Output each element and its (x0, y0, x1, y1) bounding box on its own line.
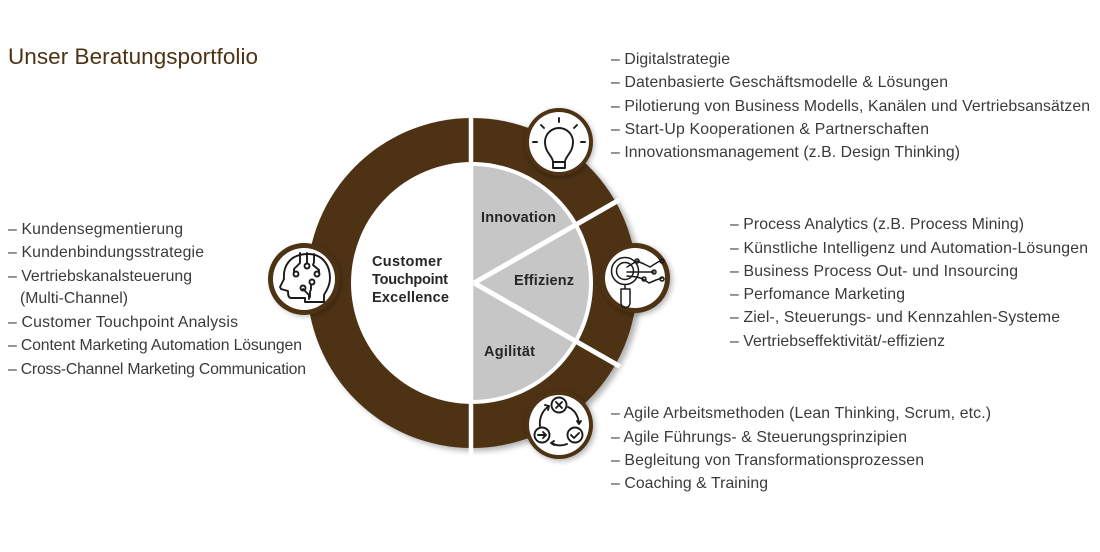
text block: Agilität services: – Coaching & Training (611, 475, 768, 492)
text block: Effizienz services: – Business Process Out- und Insourcing (730, 263, 1018, 280)
text block: Customer Touchpoint services: – Kundenbindungsstrategie (8, 244, 204, 261)
text block: Innovation services (611, 51, 1090, 161)
text block: Customer Touchpoint services: – Content Marketing Automation Lösungen (8, 337, 302, 354)
text block: Innovation services: – Pilotierung von Business Modells, Kanälen und Vertriebsansätzen (611, 98, 1090, 115)
text block: Customer Touchpoint services (8, 221, 306, 378)
icon: head with circuits (268, 243, 341, 316)
text block: Customer Touchpoint services: – Cross-Channel Marketing Communication (8, 361, 306, 378)
label: center: Excellence (372, 290, 449, 306)
outer brown ring (307, 118, 637, 448)
text block: Agilität services: – Agile Führungs- & Steuerungsprinzipien (611, 429, 907, 446)
ring diagram (307, 110, 641, 456)
label: center (372, 254, 449, 306)
title: Unser Beratungsportfolio (8, 44, 258, 69)
label: center: Customer (372, 254, 442, 270)
text block: Agilität services: – Agile Arbeitsmethoden (Lean Thinking, Scrum, etc.) (611, 405, 991, 422)
gray quadrant segments (472, 166, 589, 400)
text block: Effizienz services (730, 216, 1088, 350)
icon: light bulb (525, 108, 594, 178)
text block: Customer Touchpoint services: (Multi-Channel) (20, 290, 128, 307)
text block: Innovation services: – Datenbasierte Geschäftsmodelle & Lösungen (611, 74, 948, 91)
text block: Effizienz services: – Process Analytics (z.B. Process Mining) (730, 216, 1024, 233)
text block: Agilität services (611, 405, 991, 492)
text block: Customer Touchpoint services: – Customer Touchpoint Analysis (8, 314, 238, 331)
text block: Effizienz services: – Vertriebseffektivität/-effizienz (730, 333, 945, 350)
text block: Innovation services: – Start-Up Kooperationen & Partnerschaften (611, 121, 929, 138)
icon: agile cycle (525, 391, 595, 461)
label: Agilität: Agilität (484, 344, 535, 360)
label: Innovation: Innovation (481, 210, 556, 226)
text block: Customer Touchpoint services: – Kundensegmentierung (8, 221, 183, 238)
text block: Effizienz services: – Ziel-, Steuerungs- und Kennzahlen-Systeme (730, 309, 1060, 326)
label: Effizienz: Effizienz (514, 273, 574, 289)
text block: Effizienz services: – Künstliche Intelligenz und Automation-Lösungen (730, 240, 1088, 257)
text block: Agilität services: – Begleitung von Transformationsprozessen (611, 452, 924, 469)
icon: magnifier with network (600, 243, 672, 315)
text block: Effizienz services: – Perfomance Marketing (730, 286, 905, 303)
text block: Customer Touchpoint services: – Vertriebskanalsteuerung (8, 268, 192, 285)
text block: Innovation services: – Innovationsmanagement (z.B. Design Thinking) (611, 144, 960, 161)
label: center: Touchpoint (372, 272, 448, 288)
text block: Innovation services: – Digitalstrategie (611, 51, 730, 68)
